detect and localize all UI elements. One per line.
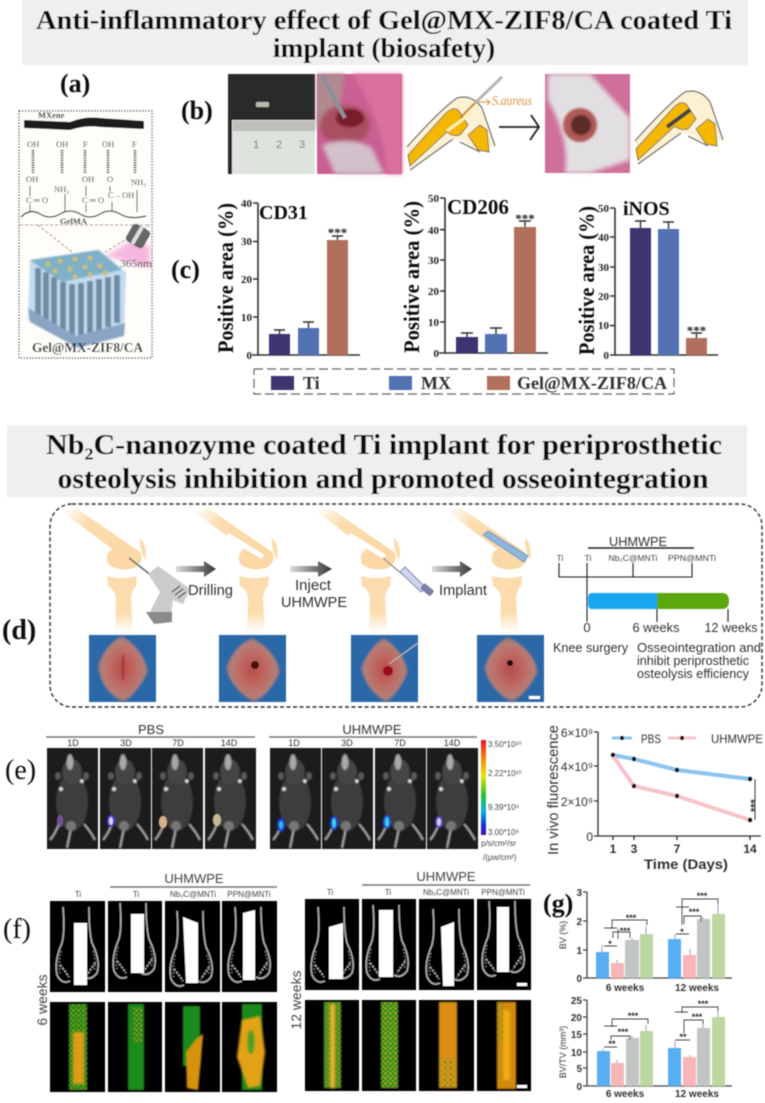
colour scale: p/s/cm²/sr: [481, 839, 516, 848]
headers: Ti: [133, 890, 139, 899]
colour scale: 3.00*10⁹: [488, 828, 519, 837]
headers: 1D: [67, 738, 79, 748]
timeline: PPN@MNTi: [668, 553, 716, 563]
label (b): (b): [181, 96, 213, 125]
chart: BV/TV: [558, 996, 732, 1100]
chart: BV percent: 12 weeks: [675, 983, 719, 994]
chart: BV/TV: ***: [698, 999, 709, 1009]
legend: groups: Ti: [303, 373, 320, 393]
chart: CD206: Positive area (%): [399, 201, 424, 353]
legend: PBS: [641, 732, 661, 746]
UV lamp: 365nm: [120, 258, 152, 270]
label (d): (d): [2, 615, 36, 646]
chart: iNOS: 50: [598, 203, 610, 215]
chart: BV/TV: BV/TV (mm³): [558, 1026, 568, 1078]
chart: BV/TV: ***: [692, 1012, 703, 1022]
headers: Ti: [385, 888, 391, 897]
chart: in vivo fluorescence: 4×10⁹: [561, 760, 593, 774]
headers: PPN@MNTi: [481, 888, 525, 897]
chart: in vivo fluorescence: 3: [631, 842, 638, 856]
3D renders: [50, 1002, 277, 1092]
timeline: [553, 534, 761, 681]
step 3: syringe: Implant: [439, 582, 488, 599]
bonding chemistry: OH: [26, 174, 38, 184]
chart: in vivo fluorescence: Time (Days): [644, 856, 728, 872]
step 2: inject: [195, 508, 347, 632]
legend: groups: [254, 369, 674, 394]
timeline: UHMWPE: [609, 534, 667, 549]
chart: BV percent: BV (%): [558, 921, 568, 949]
bonding chemistry: F: [132, 139, 137, 149]
headers: 3D: [341, 738, 353, 748]
headers: UHMWPE: [164, 871, 224, 886]
colour scale: 9.39*10⁹: [488, 803, 519, 812]
timeline: 0: [583, 620, 591, 635]
chart: iNOS: 40: [598, 232, 610, 244]
timeline: 12 weeks: [704, 620, 758, 635]
chart: CD206: 20: [428, 286, 440, 298]
diagram: S.aureus injection: S.aureus: [492, 94, 532, 109]
chart: iNOS: 0: [604, 350, 610, 362]
chart: CD206: 40: [428, 225, 440, 237]
chart: CD206: 30: [428, 255, 440, 267]
label (e): (e): [5, 755, 36, 786]
colour scale: [481, 740, 521, 862]
chart: in vivo fluorescence: ***: [749, 798, 761, 812]
label (g): (g): [543, 889, 573, 918]
chart: BV/TV: 15: [571, 1030, 582, 1041]
chart: CD31: 10: [241, 312, 252, 324]
arrow: [499, 115, 539, 140]
legend: [612, 732, 763, 746]
chart: CD206: CD206: [447, 195, 509, 219]
step 3: syringe: [317, 508, 488, 632]
chart: CD206: [399, 193, 548, 360]
headers: 7D: [394, 738, 406, 748]
chart: CD206: 50: [428, 193, 440, 205]
chart: BV percent: 3: [576, 888, 582, 899]
headers: 6 weeks: [34, 974, 50, 1026]
timeline: 6 weeks: [632, 620, 680, 635]
colour scale: 2.22*10¹⁰: [488, 769, 521, 778]
bonding chemistry: NH₂: [54, 184, 69, 194]
title banner: osseointegration: [7, 425, 747, 497]
chart: BV/TV: 6 weeks: [606, 1089, 645, 1100]
photo: implant with ruler: 2: [276, 139, 282, 151]
label (a): (a): [60, 69, 90, 98]
bonding chemistry: OH: [82, 174, 94, 184]
chart: CD206: 0: [434, 348, 440, 360]
chart: iNOS: [574, 198, 718, 362]
chart: iNOS: 10: [598, 320, 610, 332]
title banner: biosafety: implant (biosafety): [273, 32, 495, 63]
photos: [89, 635, 544, 702]
bonding chemistry: GelMA: [60, 216, 88, 226]
UHMWPE mice: [270, 748, 478, 849]
chart: BV/TV: 25: [571, 996, 582, 1007]
title banner: biosafety: Anti-inflammatory effect of Gel@MX-ZIF8/CA coated Ti: [36, 4, 732, 35]
nanotube block: [28, 250, 126, 348]
chart: BV/TV: **: [608, 1039, 616, 1049]
chart: iNOS: 20: [598, 291, 610, 303]
photo: implant with ruler: [228, 74, 315, 174]
label (c): (c): [171, 255, 200, 284]
bonding chemistry: OH: [102, 139, 114, 149]
chart: BV percent: *: [680, 927, 684, 937]
MXene layer: MXene: [38, 110, 65, 120]
chart: CD31: 30: [241, 236, 252, 248]
timeline: Knee surgery: [553, 640, 628, 655]
chart: BV percent: 2: [576, 917, 582, 928]
chart: in vivo fluorescence: 6×10⁹: [561, 726, 593, 740]
chart: BV/TV: 5: [576, 1064, 582, 1075]
bonding chemistry: OH: [56, 139, 68, 149]
timeline: osteolysis efficiency: [637, 666, 749, 681]
CT slices: [305, 899, 531, 990]
chart: in vivo fluorescence: 7: [674, 842, 681, 856]
headers: 12 weeks: [288, 970, 304, 1030]
photo: infected wound: [545, 74, 630, 173]
bonding chemistry: C – OH: [108, 190, 134, 200]
panel a: coating schematic: [19, 110, 152, 358]
bonding chemistry: [21, 139, 146, 226]
headers: 14D: [221, 738, 238, 748]
chart: CD31: Positive area (%): [213, 203, 238, 353]
chart: CD206: ***: [515, 211, 535, 226]
UV lamp: [105, 222, 152, 270]
title banner: osseointegration: Nb₂C-nanozyme coated Ti implant for periprosthetic: [46, 430, 722, 461]
label (f): (f): [3, 914, 31, 945]
PBS mice: [47, 748, 256, 849]
diagram: S.aureus injection: [407, 77, 532, 170]
headers: 7D: [172, 738, 184, 748]
chart: BV percent: ***: [626, 913, 637, 923]
bonding chemistry: C ═ O: [82, 195, 104, 205]
timeline: inhibit periprosthetic: [637, 653, 749, 668]
chart: BV/TV: ***: [618, 1027, 629, 1037]
chart: BV/TV: 20: [571, 1013, 582, 1024]
headers: UHMWPE: [342, 722, 402, 737]
chart: BV percent: ***: [620, 926, 631, 936]
legend: UHMWPE: [711, 732, 763, 746]
chart: iNOS: iNOS: [623, 198, 670, 220]
timeline: Ti: [557, 553, 563, 563]
photo: injection site: [317, 74, 402, 174]
timeline: Osseointegration and: [637, 640, 761, 655]
chart: iNOS: Positive area (%): [574, 206, 599, 355]
headers: 3D: [120, 738, 132, 748]
MXene layer: [24, 110, 144, 130]
caption: Gel@MX-ZIF8/CA: [32, 341, 144, 356]
step 2: inject: Inject: [295, 577, 332, 594]
headers: [34, 871, 277, 1026]
chart: BV percent: 1: [576, 946, 582, 957]
chart: in vivo fluorescence: 14: [743, 842, 757, 856]
chart: CD31: CD31: [259, 202, 308, 224]
title banner: osseointegration: osteolysis inhibition and promoted osseointegration: [58, 464, 709, 495]
panel b: surgical photos and diagrams: [228, 74, 723, 174]
arrow: [290, 561, 332, 577]
chart: iNOS: 30: [598, 262, 610, 274]
step 1: drilling: [63, 508, 233, 632]
chart: CD206: 10: [428, 317, 440, 329]
photo: implant with ruler: 3: [299, 139, 305, 151]
chart: in vivo fluorescence: In vivo fluorescence: [545, 725, 562, 855]
3D renders: [305, 1000, 531, 1091]
colour scale: 3.50*10¹⁰: [488, 740, 521, 749]
headers: 14D: [444, 738, 461, 748]
headers: Ti: [75, 890, 81, 899]
chart: CD31: 40: [241, 198, 252, 210]
chart: BV/TV: 0: [576, 1082, 582, 1093]
arrow: [176, 561, 216, 577]
headers: UHMWPE: [416, 869, 476, 884]
chart: BV/TV: **: [679, 1032, 687, 1042]
bonding chemistry: F: [83, 139, 88, 149]
legend: groups: Gel@MX-ZIF8/CA: [517, 373, 667, 393]
timeline: Ti: [585, 553, 591, 563]
step 2: inject: UHMWPE: [281, 594, 347, 611]
headers: PBS: [138, 722, 164, 737]
bonding chemistry: OH: [27, 139, 39, 149]
chart: BV percent: 0: [576, 974, 582, 985]
chart: BV/TV: 12 weeks: [675, 1089, 719, 1100]
bonding chemistry: O: [107, 174, 113, 184]
chart: BV/TV: 10: [571, 1048, 582, 1059]
chart: CD31: 0: [246, 350, 252, 362]
chart: BV/TV: ***: [628, 1011, 639, 1021]
chart: iNOS: ***: [687, 323, 706, 338]
headers: PPN@MNTi: [227, 890, 271, 899]
chart: in vivo fluorescence: 0: [586, 830, 593, 844]
chart: BV percent: 6 weeks: [606, 983, 645, 994]
chart: CD31: 20: [241, 274, 252, 286]
photo: implant with ruler: 1: [253, 139, 259, 151]
bonding chemistry: NH₂: [131, 177, 146, 187]
chart: BV percent: [558, 888, 732, 994]
chart: BV percent: *: [608, 939, 612, 949]
diagram: implant in femur: [635, 90, 723, 164]
chart: CD31: [213, 198, 360, 362]
headers: Nb₂C@MNTi: [170, 890, 216, 899]
chart: BV percent: ***: [697, 891, 708, 901]
chart: BV percent: ***: [689, 907, 700, 917]
headers: [288, 869, 530, 1030]
title banner: biosafety: [22, 0, 748, 65]
headers: Ti: [327, 888, 333, 897]
headers: Nb₂C@MNTi: [423, 888, 469, 897]
bonding chemistry: C ═ O: [26, 195, 48, 205]
CT slices: [50, 901, 277, 992]
colour scale: /(μw/cm²): [483, 853, 517, 862]
chart: in vivo fluorescence: [545, 725, 763, 872]
panel d: surgical procedure and timeline: [50, 504, 762, 707]
arrow: [432, 561, 472, 577]
panel e: in vivo images: [46, 722, 521, 862]
timeline: Nb₂C@MNTi: [609, 553, 658, 563]
chart: CD31: ***: [328, 225, 347, 240]
headers: 1D: [288, 738, 300, 748]
panel f: 6 weeks micro-CT: [34, 871, 277, 1092]
step 4: implant: [448, 508, 531, 632]
step 1: drilling: Drilling: [188, 582, 233, 599]
legend: groups: MX: [421, 373, 451, 393]
chart: in vivo fluorescence: 2×10⁹: [561, 795, 593, 809]
chart: in vivo fluorescence: 1: [610, 842, 617, 856]
panel f: 12 weeks micro-CT: [288, 869, 531, 1091]
headers: [46, 722, 477, 748]
